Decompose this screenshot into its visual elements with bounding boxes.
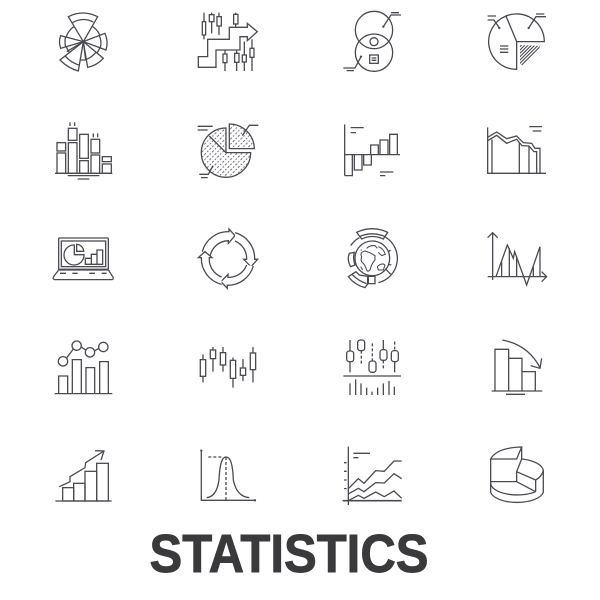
icon: growth bar chart with arrow	[55, 451, 112, 501]
icon: falling bar chart	[492, 340, 542, 394]
icon: candlestick chart	[200, 347, 256, 388]
icon: 3D pie chart	[491, 447, 543, 502]
icon: laptop with charts	[53, 238, 113, 280]
icon: fader controls	[343, 340, 401, 395]
icon: declining area chart	[488, 127, 546, 173]
infographic canvas	[52, 10, 548, 573]
icon: bars with connected line points	[55, 341, 112, 394]
title: STATISTICS	[150, 524, 428, 584]
icon: multi-line chart	[343, 447, 402, 505]
icon: venn diagram	[343, 11, 401, 71]
icon: exploded pie chart with hatching	[488, 14, 547, 69]
icon: circular arrows cycle	[198, 229, 258, 288]
icon: globe radial chart	[348, 229, 397, 288]
icon: candlesticks with stepped arrow	[198, 13, 257, 71]
icon: zigzag line chart with axes	[488, 233, 547, 285]
icon: positive and negative bar chart	[345, 124, 400, 176]
icon: bell curve	[200, 449, 256, 501]
icon: dotted pie chart	[198, 124, 258, 178]
icon: stacked bar chart	[55, 122, 112, 179]
icon: polar rose chart	[59, 13, 107, 71]
